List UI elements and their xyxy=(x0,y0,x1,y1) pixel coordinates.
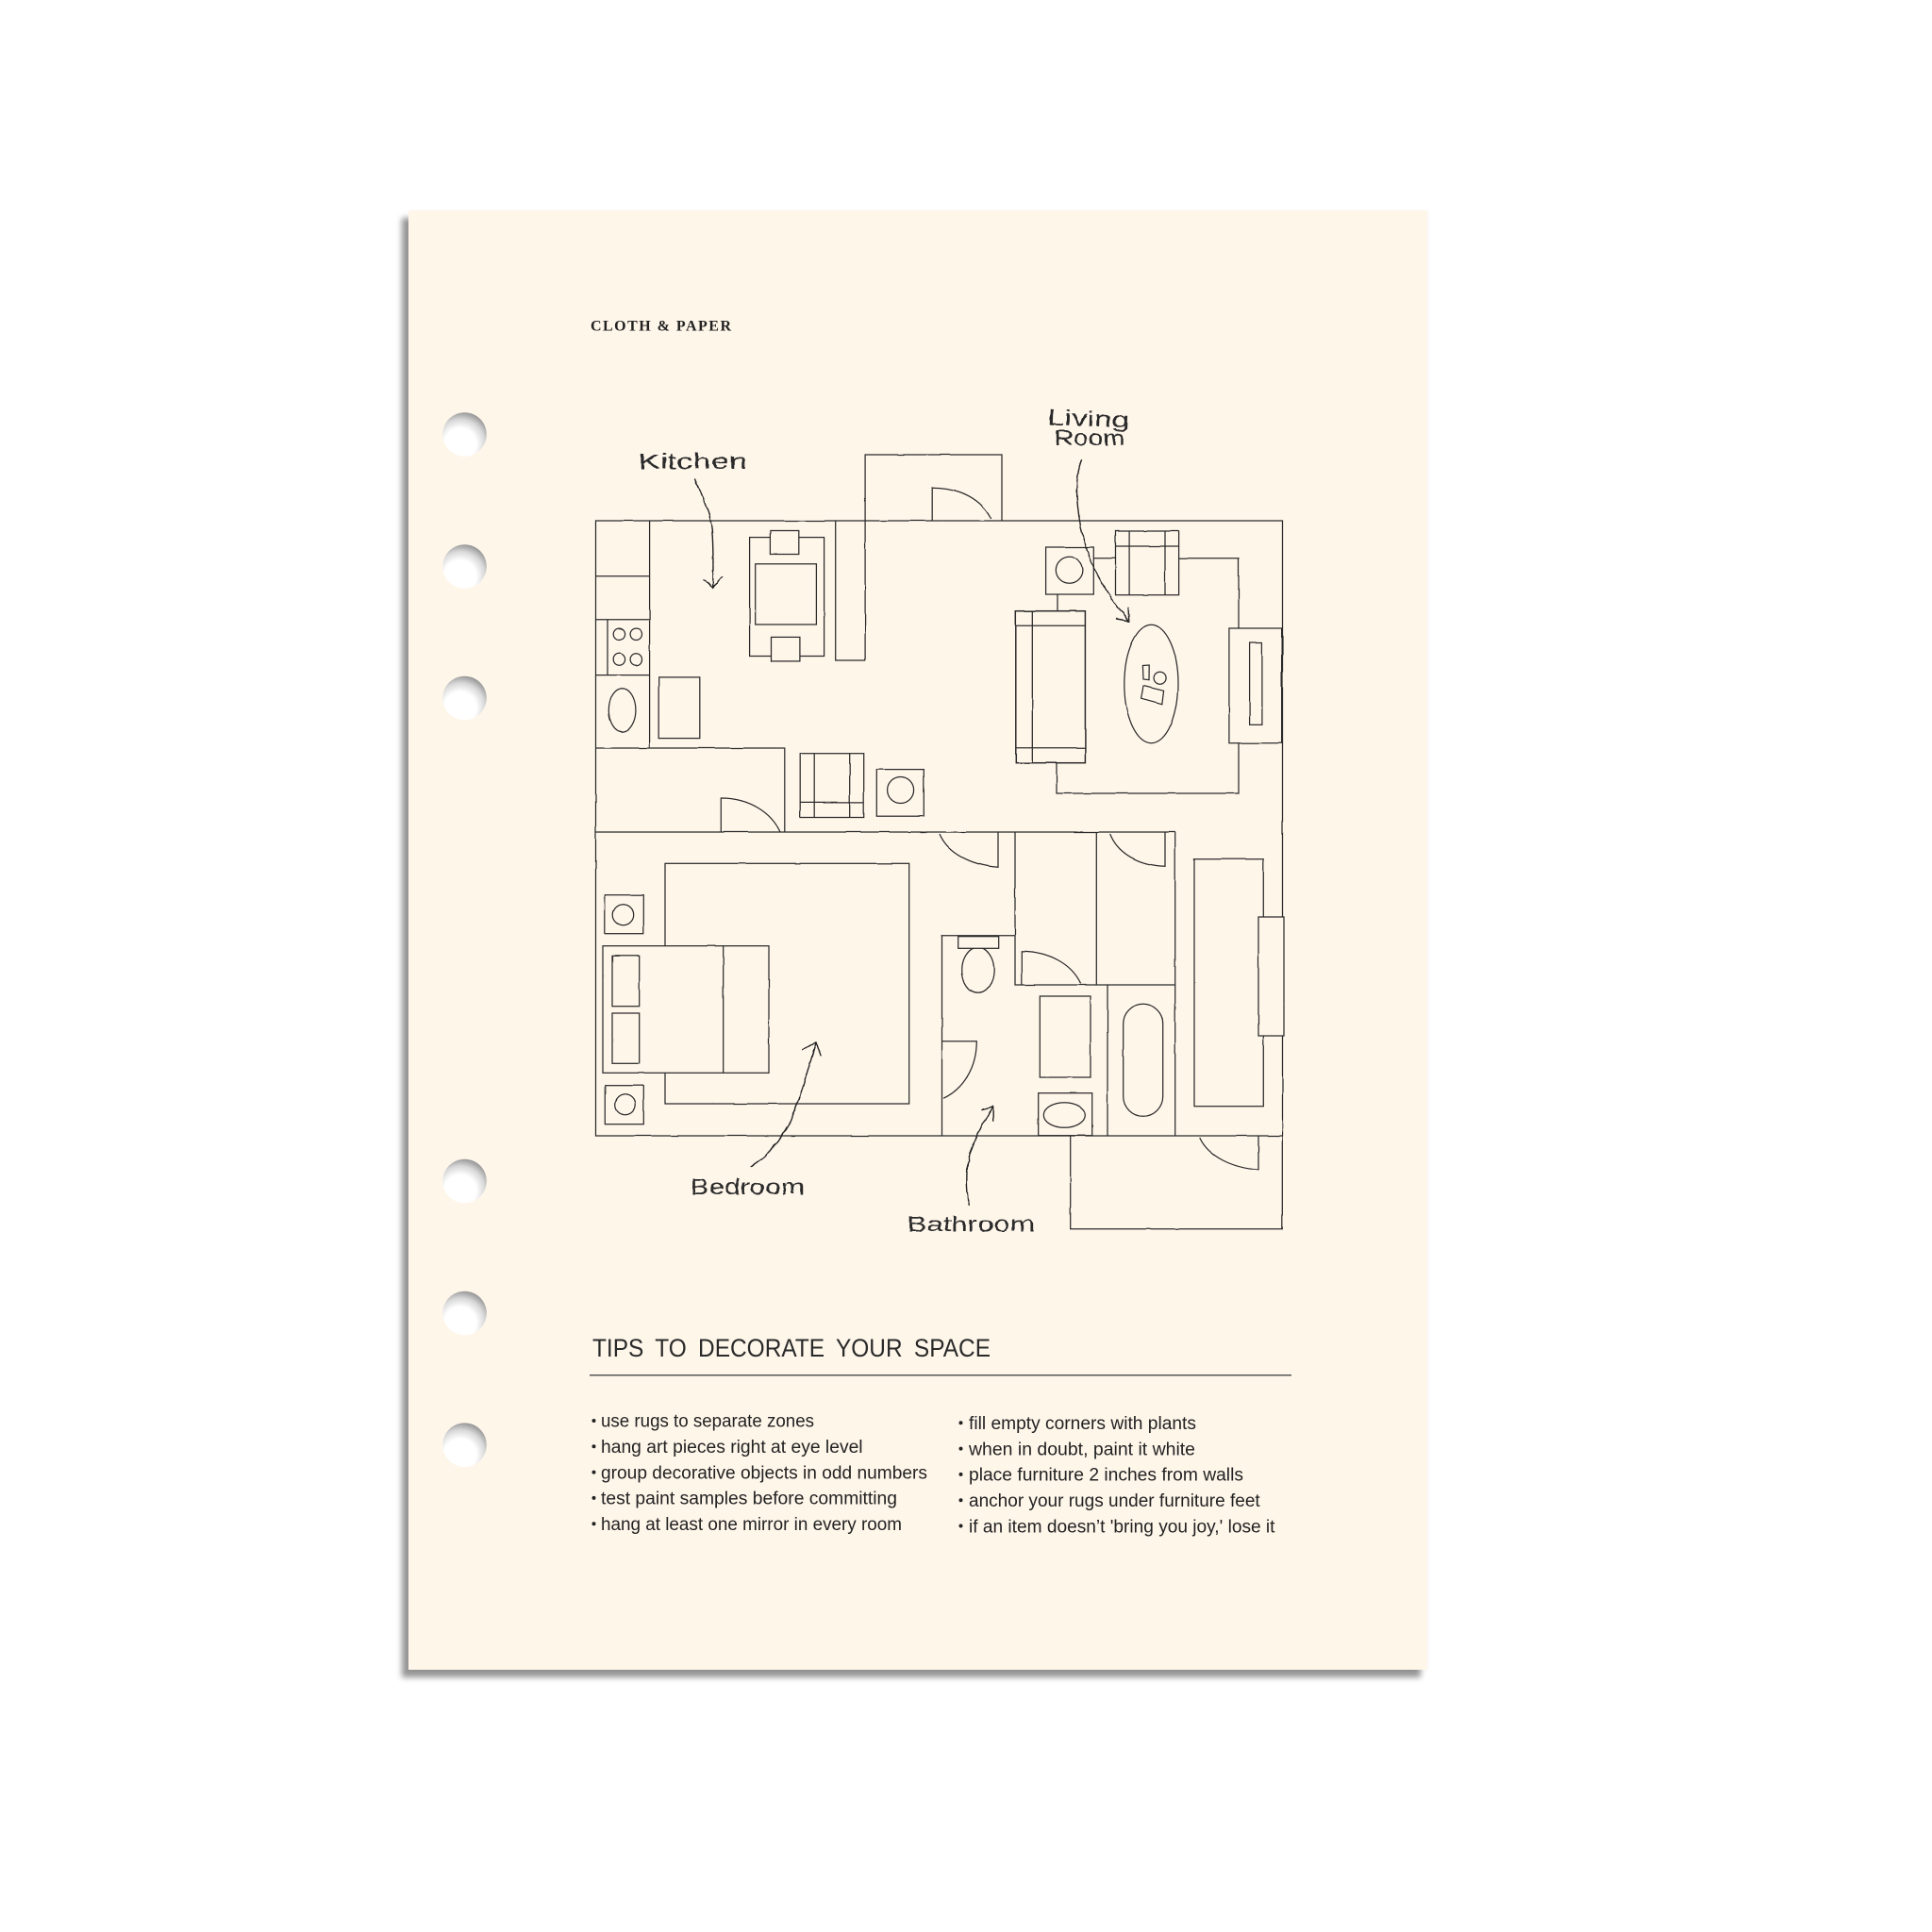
bedroom door xyxy=(940,832,998,867)
sofa xyxy=(1016,611,1085,763)
bed with pillows xyxy=(603,946,769,1073)
binder holes xyxy=(442,412,487,1467)
bedroom rug xyxy=(665,863,909,1104)
label: Room: Room xyxy=(1055,425,1124,450)
heading rule xyxy=(590,1374,1291,1375)
label: Kitchen: Kitchen xyxy=(639,449,747,474)
tips list: right column: fill empty corners with plants xyxy=(969,1414,1196,1434)
lower balcony with door xyxy=(1071,1136,1282,1229)
bathtub xyxy=(1124,1004,1163,1116)
tips list: right column: if an item doesn’t 'bring you joy,' lose it xyxy=(969,1517,1275,1537)
tips list: right column: anchor your rugs under furniture feet xyxy=(969,1491,1260,1511)
brand name: CLOTH & PAPER xyxy=(591,319,731,334)
arrow: bedroom xyxy=(752,1041,821,1166)
tips list: left column: group decorative objects in odd numbers xyxy=(601,1463,927,1483)
bathroom door xyxy=(942,1041,976,1098)
closet doors xyxy=(1022,832,1165,985)
panel: planner paper sheet xyxy=(408,210,1427,1670)
kitchen counters and stove xyxy=(596,521,650,748)
tips list: right column: when in doubt, paint it white xyxy=(968,1440,1195,1459)
dining set xyxy=(750,530,824,661)
label: Living: Living xyxy=(1047,405,1130,432)
toilet xyxy=(958,937,999,992)
label: Bedroom: Bedroom xyxy=(691,1174,805,1199)
label: Bathroom: Bathroom xyxy=(908,1212,1035,1237)
kitchen fridge xyxy=(658,677,700,739)
hall side table xyxy=(876,770,924,816)
living room rug xyxy=(1057,558,1239,793)
tips list: left column: hang at least one mirror in every room xyxy=(601,1515,902,1535)
tips list: right column xyxy=(958,1414,1275,1537)
closet and entry porch with door xyxy=(836,455,1002,660)
bathroom sink xyxy=(1039,1093,1092,1136)
floor plan xyxy=(596,455,1284,1229)
room annotations xyxy=(639,405,1130,1237)
arrow: kitchen xyxy=(695,479,723,588)
tips list: right column: place furniture 2 inches from walls xyxy=(969,1466,1243,1486)
bedroom wardrobe xyxy=(1194,859,1263,1107)
coffee table with objects xyxy=(1124,625,1178,743)
arrow: living room xyxy=(1077,459,1129,621)
armchair by hall xyxy=(800,754,864,817)
tips list: left column: test paint samples before committing xyxy=(601,1490,897,1509)
tips list: left column xyxy=(592,1412,927,1535)
bedroom nightstands xyxy=(605,895,643,1124)
tips list: left column: hang art pieces right at eye level xyxy=(601,1438,863,1457)
outer walls xyxy=(596,521,1283,1136)
arrow: bathroom xyxy=(967,1107,993,1205)
tips list: left column: use rugs to separate zones xyxy=(601,1412,814,1432)
heading: TIPS TO DECORATE YOUR SPACE xyxy=(592,1334,991,1362)
living room side table xyxy=(1046,547,1093,594)
wardrobe unit on wall xyxy=(1258,917,1284,1036)
living room armchair xyxy=(1115,531,1179,595)
media unit xyxy=(1229,628,1282,743)
hall walls and door xyxy=(596,748,1175,832)
bathroom vanity xyxy=(1040,996,1091,1077)
bathroom and closet walls xyxy=(941,832,1175,1136)
